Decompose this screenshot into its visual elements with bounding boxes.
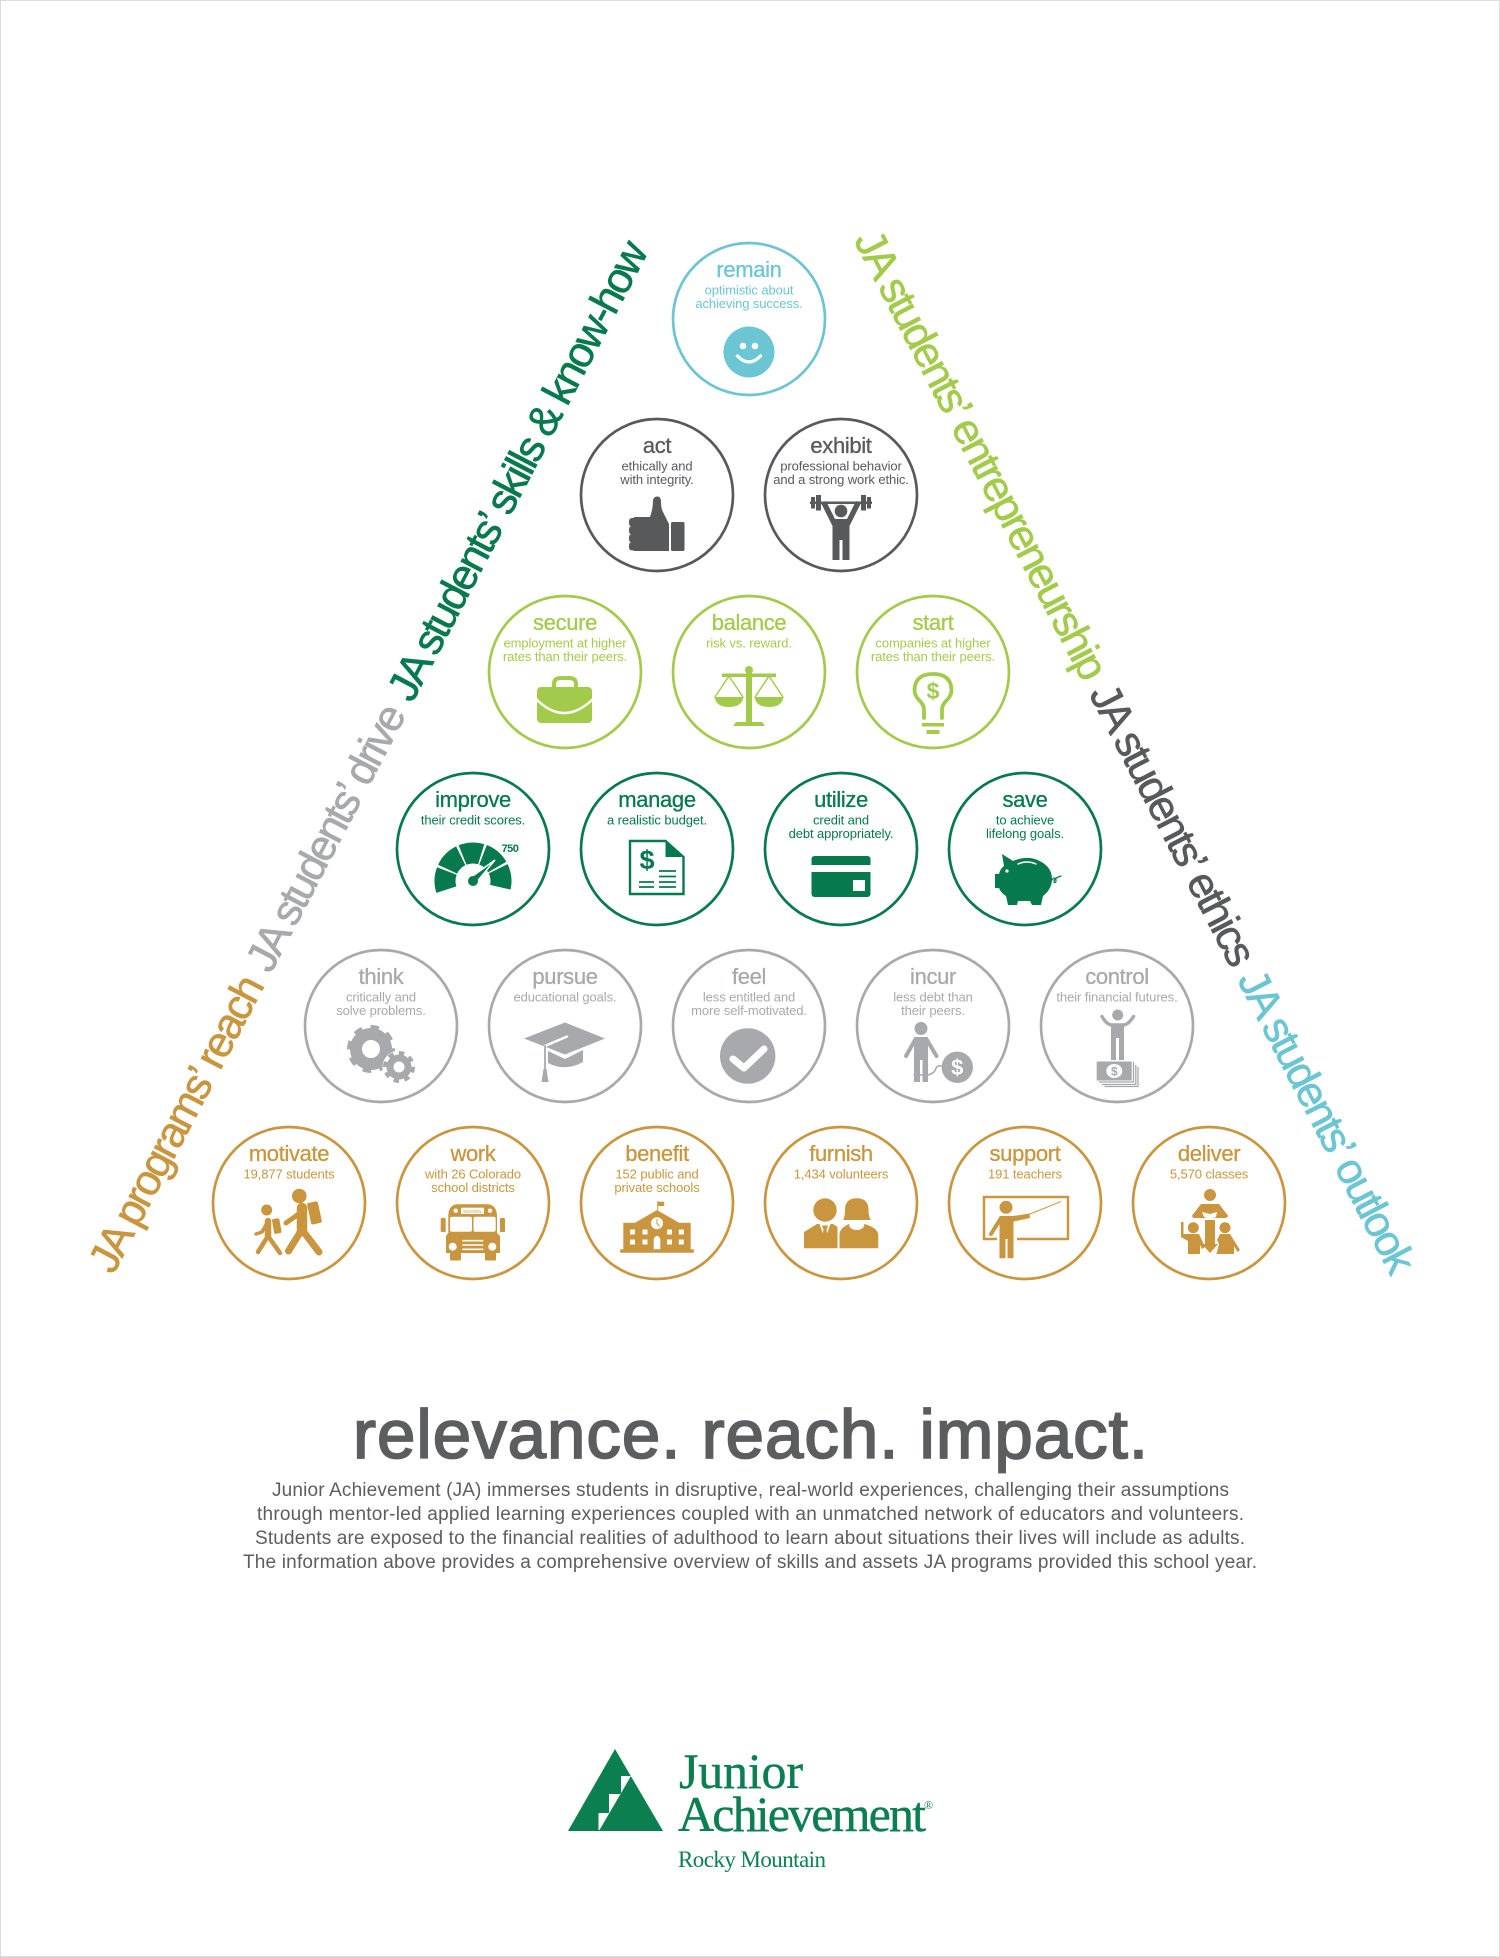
icon: credit score gauge <box>438 843 519 916</box>
panel: think: solve problems. <box>336 1003 426 1018</box>
panel: save: save <box>1002 787 1048 812</box>
panel: furnish: 1,434 volunteers <box>794 1166 889 1182</box>
title: relevance. reach. impact. <box>353 1396 1148 1473</box>
panel: incur <box>857 950 1009 1102</box>
panel: motivate <box>213 1127 365 1279</box>
panel: act <box>581 419 733 571</box>
panel: secure: employment at higher <box>503 636 627 650</box>
panel: save: lifelong goals. <box>986 826 1064 841</box>
text block: description: The information above provides a comprehensive overview of skills and assets JA programs provided this school year. <box>243 1552 1257 1573</box>
panel: start: companies at higher <box>875 636 991 650</box>
icon: person standing on money <box>1097 1010 1138 1086</box>
panel: improve: improve <box>435 787 511 812</box>
text block: description: through mentor-led applied learning experiences coupled with an unmatched network of educators and volunteers. <box>257 1504 1244 1525</box>
icon: credit card <box>811 856 871 897</box>
panel: exhibit: professional behavior <box>780 458 903 474</box>
right diagonal heading <box>845 222 1425 1282</box>
panel: feel: less entitled and <box>703 990 795 1004</box>
panel: manage: a realistic budget. <box>607 812 707 828</box>
panel: improve: their credit scores. <box>421 812 525 828</box>
logo: Junior Achievement Rocky Mountain: Junior <box>679 1743 803 1799</box>
icon: weightlifter <box>810 495 872 560</box>
logo: Junior Achievement Rocky Mountain: Rocky Mountain <box>678 1847 826 1872</box>
panel: feel <box>673 950 825 1102</box>
logo: Junior Achievement Rocky Mountain <box>568 1743 933 1872</box>
panel: think: think <box>359 964 405 989</box>
panel: work: work <box>449 1141 497 1166</box>
panel: exhibit: and a strong work ethic. <box>773 472 909 487</box>
panel: remain <box>673 243 825 395</box>
panel: control <box>1041 950 1193 1102</box>
icon: person with debt ball <box>906 1022 973 1083</box>
icon: light bulb with dollar: $ <box>927 678 940 704</box>
panel: deliver: 5,570 classes <box>1170 1166 1249 1182</box>
panel: balance: balance <box>712 610 786 635</box>
panel: work: school districts <box>431 1180 515 1195</box>
panel: manage <box>581 773 733 925</box>
icon: thumbs up <box>629 496 684 551</box>
icon: school bus <box>441 1204 505 1260</box>
panel: pursue <box>489 950 641 1102</box>
icon: check mark <box>720 1028 775 1084</box>
panel: utilize: credit and <box>813 812 869 828</box>
panel: save <box>949 773 1101 925</box>
panel: incur: incur <box>910 964 956 989</box>
diagonal label: JA programs' reach: JA programs’ reach <box>80 969 273 1280</box>
panel: secure <box>489 596 641 748</box>
icon: school bus: SCHOOL <box>463 1209 482 1214</box>
panel: utilize <box>765 773 917 925</box>
text block: description <box>243 1480 1257 1573</box>
panel: benefit: 152 public and <box>615 1166 699 1182</box>
diagonal label: JA students' skills and know-how: JA students’ skills & know-how <box>378 232 658 709</box>
panel: secure: secure <box>533 610 597 635</box>
diagonal label: JA students' outlook: JA students’ outlook <box>1228 962 1425 1282</box>
icon: teacher at whiteboard <box>984 1197 1068 1258</box>
panel: support: 191 teachers <box>988 1166 1063 1182</box>
panel: motivate: 19,877 students <box>243 1166 335 1182</box>
panel: act: with integrity. <box>619 472 694 487</box>
panel: remain: achieving success. <box>695 296 803 311</box>
icon: school building <box>620 1202 694 1253</box>
panel: furnish <box>765 1127 917 1279</box>
icon: two volunteers <box>804 1198 878 1248</box>
panel: start: start <box>912 610 954 635</box>
panel: improve <box>397 773 549 925</box>
icon: budget document: $ <box>639 845 655 875</box>
diagonal label: JA students' ethics: JA students’ ethics <box>1080 676 1265 974</box>
icon: two students walking <box>256 1189 322 1253</box>
panel: work: with 26 Colorado <box>424 1166 521 1182</box>
panel: save: to achieve <box>996 812 1054 828</box>
panel: deliver: deliver <box>1178 1141 1240 1166</box>
panel: motivate: motivate <box>249 1141 329 1166</box>
panel: manage: manage <box>618 787 696 812</box>
icon: balance scales <box>714 666 784 726</box>
icon: person standing on money: $ <box>1111 1064 1118 1078</box>
panel: support <box>949 1127 1101 1279</box>
icon: JA triangle with stairs <box>568 1749 663 1831</box>
text block: description: Students are exposed to the financial realities of adulthood to learn about situations their lives will include as adults. <box>255 1528 1245 1549</box>
logo: Junior Achievement Rocky Mountain: ® <box>924 1798 933 1812</box>
panel: feel: more self-motivated. <box>691 1003 807 1018</box>
icon: smiley face <box>724 326 774 378</box>
icon: gears <box>351 1029 416 1084</box>
panel: pursue: pursue <box>532 964 598 989</box>
panel: secure: rates than their peers. <box>503 649 627 664</box>
icon: budget document <box>630 841 684 894</box>
left diagonal heading <box>80 232 658 1280</box>
panel: control: control <box>1085 964 1149 989</box>
panel: benefit: private schools <box>614 1180 700 1195</box>
panel: support: support <box>990 1141 1061 1166</box>
icon: piggy bank <box>995 854 1061 905</box>
panel: benefit: benefit <box>625 1141 689 1166</box>
panel: work <box>397 1127 549 1279</box>
panel: utilize: debt appropriately. <box>789 826 893 841</box>
icon: teacher and children <box>1181 1189 1240 1254</box>
panel: deliver <box>1133 1127 1285 1279</box>
panel: balance: risk vs. reward. <box>706 636 792 650</box>
panel: pursue: educational goals. <box>514 990 616 1004</box>
diagonal label: JA students' drive: JA students’ drive <box>237 697 415 979</box>
icon: briefcase <box>536 678 593 723</box>
panel: think: critically and <box>346 990 416 1004</box>
panel: incur: their peers. <box>901 1003 965 1018</box>
panel: utilize: utilize <box>814 787 868 812</box>
text block: description: Junior Achievement (JA) immerses students in disruptive, real-world experiences, challenging their assumptions <box>272 1480 1229 1501</box>
icon: credit score gauge: 750 <box>502 843 519 855</box>
diagonal label: JA students' entrepreneurship: JA students’ entrepreneurship <box>845 222 1117 687</box>
panel: feel: feel <box>732 964 766 989</box>
icon: light bulb with dollar <box>914 674 952 734</box>
panel: start: rates than their peers. <box>871 649 995 664</box>
icon: graduation cap <box>524 1022 605 1082</box>
panel: remain: optimistic about <box>705 282 794 298</box>
panel: act: act <box>643 433 671 458</box>
panel: incur: less debt than <box>893 990 973 1004</box>
panel: start <box>857 596 1009 748</box>
icon: person with debt ball: $ <box>951 1055 963 1080</box>
panel: act: ethically and <box>622 458 692 474</box>
panel: exhibit <box>765 419 917 571</box>
panel: benefit <box>581 1127 733 1279</box>
panel: think <box>305 950 457 1102</box>
panel: furnish: furnish <box>809 1141 873 1166</box>
panel: remain: remain <box>716 257 782 282</box>
panel: control: their financial futures. <box>1056 990 1178 1004</box>
panel: balance <box>673 596 825 748</box>
panel: exhibit: exhibit <box>810 433 872 458</box>
logo: Junior Achievement Rocky Mountain: Achievement <box>678 1786 926 1842</box>
